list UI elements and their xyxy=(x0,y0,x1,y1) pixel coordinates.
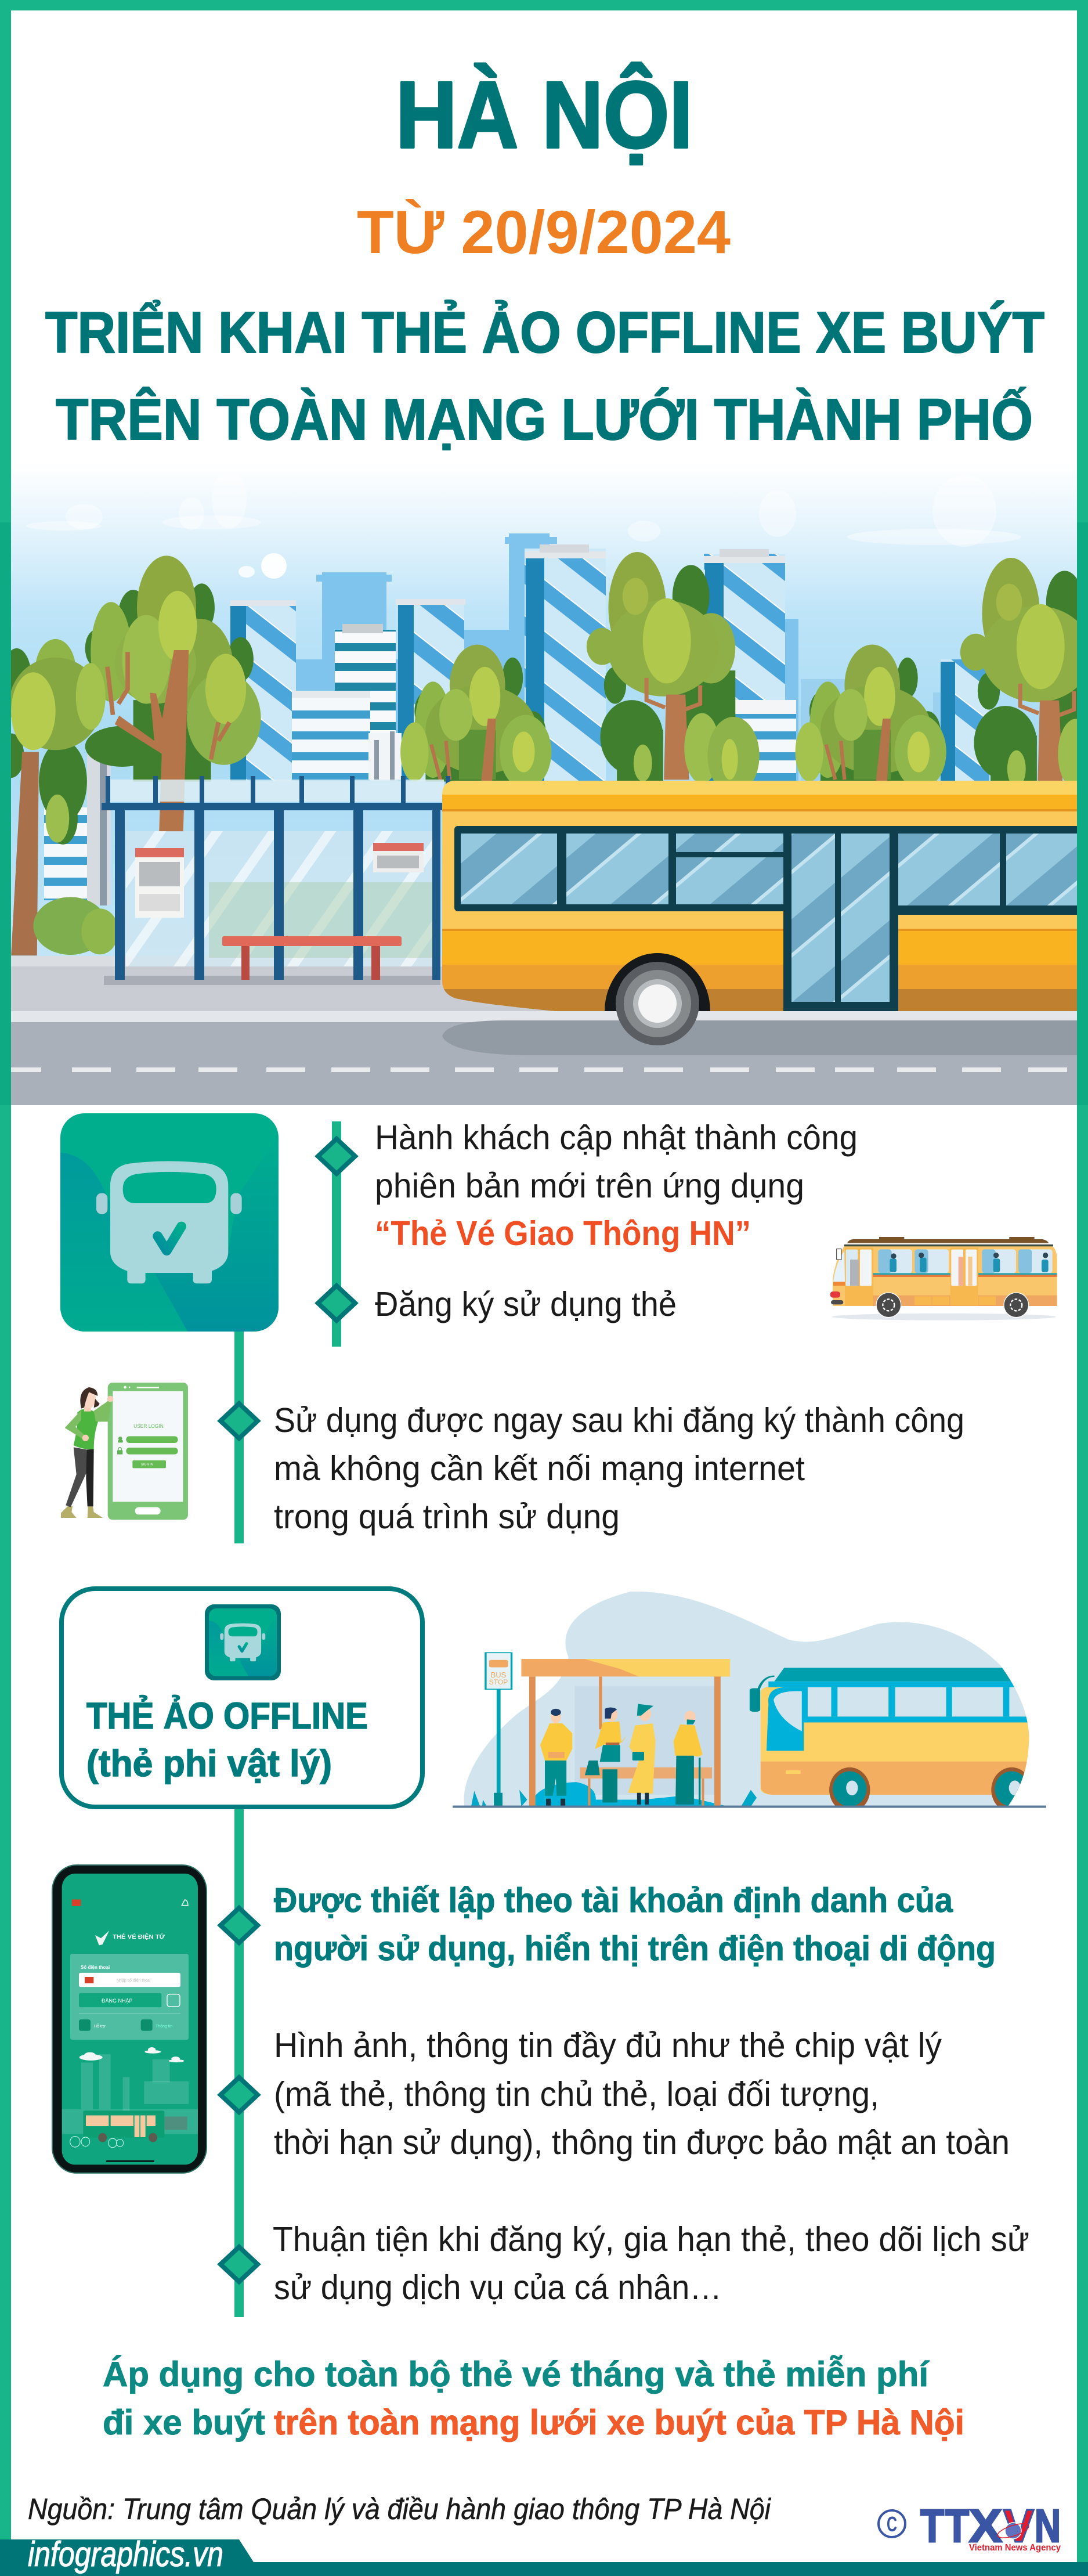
copyright mark: C xyxy=(887,2512,897,2536)
text: update app line 2: phiên bản mới trên ứng dụng xyxy=(375,1167,804,1205)
panel: step two xyxy=(221,1401,964,1536)
text: register: Đăng ký sử dụng thẻ xyxy=(375,1285,677,1323)
bench xyxy=(222,936,402,980)
text: identity account: Được thiết lập theo tài khoản định danh của xyxy=(274,1881,953,1920)
diamond marker xyxy=(221,2247,258,2282)
text: convenience line 2: sử dụng dịch vụ của cá nhân… xyxy=(274,2268,722,2307)
mini bus xyxy=(83,2110,187,2142)
bus wheel xyxy=(605,953,710,1045)
text: convenience: Thuận tiện khi đăng ký, gia hạn thẻ, theo dõi lịch sử xyxy=(273,2220,1029,2258)
app text: ĐĂNG NHẬP xyxy=(102,1998,133,2004)
bus wheels xyxy=(876,1292,1029,1318)
text: card details line 2: (mã thẻ, thông tin chủ thẻ, loại đối tượng, xyxy=(274,2075,879,2113)
bus shadow xyxy=(442,1020,1077,1055)
lane dashes xyxy=(11,1067,1067,1072)
panel: virtual card label xyxy=(62,1589,422,1807)
app text: Số điện thoại xyxy=(81,1965,110,1970)
illustration: bus stop street scene xyxy=(0,463,1088,1105)
wordmark: X xyxy=(969,2500,1002,2552)
wordmark: T xyxy=(920,2500,944,2552)
home bar xyxy=(106,2160,154,2162)
sky xyxy=(11,463,1077,962)
globe xyxy=(996,2521,1030,2541)
app text xyxy=(81,1933,172,2029)
phone body xyxy=(52,1865,207,2173)
panel: step one xyxy=(318,1119,858,1323)
heading: date: TỪ 20/9/2024 xyxy=(357,199,731,266)
person 2 xyxy=(585,1708,627,1803)
panel: card features xyxy=(221,1881,1029,2307)
app text: Thông tin xyxy=(156,2025,172,2029)
person 3 xyxy=(628,1704,656,1805)
phone xyxy=(108,1383,188,1520)
bell xyxy=(182,1900,188,1906)
login card xyxy=(70,1954,189,2040)
city silhouette xyxy=(62,2054,198,2134)
illustration: phone with ticket app xyxy=(52,1865,207,2173)
callout: scope of application: trên toàn mạng lưới xe buýt của TP Hà Nội xyxy=(274,2403,964,2442)
wordmark: V xyxy=(1003,2500,1034,2552)
phone: SIGN IN xyxy=(141,1463,153,1466)
illustration: woman with login phone xyxy=(61,1383,188,1520)
background blob xyxy=(464,1592,1029,1806)
wordmark: N xyxy=(1035,2500,1061,2552)
label: non-physical card: (thẻ phi vật lý) xyxy=(86,1742,332,1784)
logo: TTXVN xyxy=(879,2500,1061,2553)
callout: scope of application: Áp dụng cho toàn bộ thẻ vé tháng và thẻ miễn phí xyxy=(103,2355,930,2394)
shelter xyxy=(521,1659,730,1806)
source note: Nguồn: Trung tâm Quản lý và điều hành giao thông TP Hà Nội xyxy=(28,2492,772,2526)
diamond marker xyxy=(221,1404,258,1438)
wordmark: T xyxy=(945,2500,969,2552)
label: virtual card: THẺ ẢO OFFLINE xyxy=(86,1694,368,1737)
person 4 xyxy=(674,1711,703,1805)
title xyxy=(45,62,1044,452)
copyright mark xyxy=(879,2510,905,2537)
bus windows xyxy=(454,826,1077,1011)
background skyline xyxy=(296,533,968,784)
road xyxy=(11,1011,1077,1022)
diamond marker xyxy=(318,1139,355,1174)
website: infographics.vn xyxy=(28,2535,223,2574)
woman xyxy=(61,1387,113,1518)
sign text xyxy=(489,1671,508,1686)
bus shadow xyxy=(832,1314,1056,1321)
app text: Hỗ trợ xyxy=(94,2023,106,2029)
text: update app: Hành khách cập nhật thành công xyxy=(375,1119,858,1157)
app text: Nhập số điện thoại xyxy=(117,1978,151,1983)
text: identity account line 2: người sử dụng, hiển thị trên điện thoại di động xyxy=(274,1929,996,1968)
coach xyxy=(761,1668,1032,1812)
check logo xyxy=(95,1931,109,1945)
sign pole xyxy=(486,1653,512,1806)
clouds xyxy=(26,470,1021,579)
plants xyxy=(471,1790,757,1806)
diamond marker xyxy=(318,1286,355,1321)
icon: app icon small xyxy=(205,1604,281,1680)
phone screen xyxy=(62,1874,198,2164)
illustration: small yellow bus xyxy=(830,1237,1057,1321)
heading: line 2: TRÊN TOÀN MẠNG LƯỚI THÀNH PHỐ xyxy=(56,387,1033,452)
footer band xyxy=(0,2535,1088,2576)
text: use offline line 3: trong quá trình sử dụng xyxy=(274,1498,620,1536)
callout: scope of application xyxy=(103,2355,964,2442)
diamond marker xyxy=(221,2077,258,2112)
text: use offline line 1: Sử dụng được ngay sau khi đăng ký thành công xyxy=(274,1401,964,1439)
text: use offline line 2: mà không cần kết nối mạng internet xyxy=(274,1449,805,1488)
heading: city: HÀ NỘI xyxy=(396,62,693,168)
text: card details line 3: thời hạn sử dụng), thông tin được bảo mật an toàn xyxy=(274,2123,1010,2162)
ground line xyxy=(453,1806,1046,1808)
illustration: passengers at bus stop xyxy=(453,1592,1046,1812)
yellow city bus xyxy=(442,781,1077,1045)
towers xyxy=(44,544,989,905)
diamond marker xyxy=(221,1908,258,1943)
text: card details: Hình ảnh, thông tin đầy đủ như thẻ chip vật lý xyxy=(274,2026,942,2065)
sign text: BUS xyxy=(491,1671,507,1679)
phone: USER LOGIN xyxy=(133,1423,164,1429)
clouds xyxy=(79,2047,184,2062)
icon: app icon large xyxy=(60,1113,279,1332)
sign text: STOP xyxy=(489,1678,508,1686)
timetable posters xyxy=(135,843,424,918)
connector lines xyxy=(234,1121,341,2317)
callout: scope of application: đi xe buýt xyxy=(103,2403,265,2442)
cyclists xyxy=(70,2137,124,2148)
text: app name: “Thẻ Vé Giao Thông HN” xyxy=(375,1214,751,1253)
bus shelter xyxy=(102,776,450,985)
trees xyxy=(0,552,1088,955)
app text: THẺ VÉ ĐIỆN TỬ xyxy=(113,1933,165,1940)
agency name: Vietnam News Agency xyxy=(969,2543,1061,2553)
flag xyxy=(72,1899,81,1906)
person 1 xyxy=(540,1709,572,1806)
wordmark xyxy=(920,2500,1061,2552)
pavement xyxy=(11,956,1077,1012)
